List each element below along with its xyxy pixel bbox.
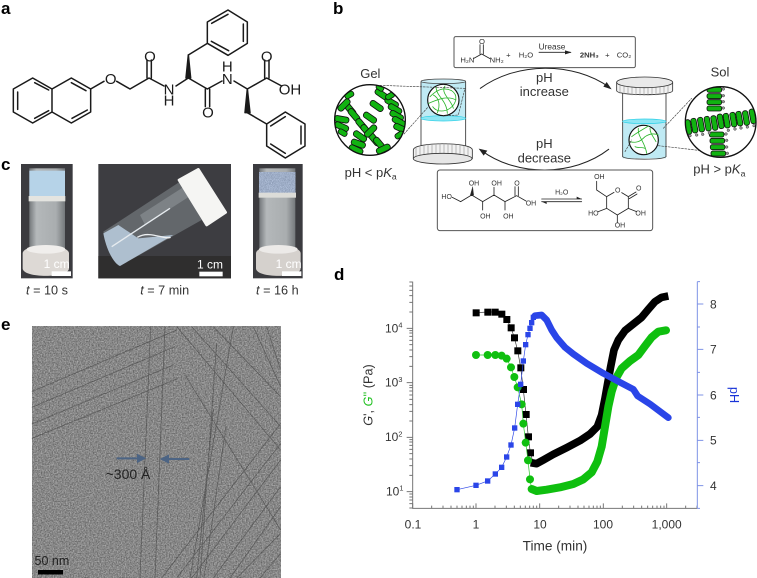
panel a: chemical structure of gelator: O [144, 48, 156, 65]
pH axis tick labels: 5 [710, 434, 717, 448]
dashed zoom lines [380, 85, 710, 152]
gluconic acid and lactone box: O [615, 188, 621, 195]
labels: pH increase and decrease: pH [536, 136, 553, 151]
urease reaction box: CO₂ [617, 50, 631, 59]
series: G' black [473, 296, 668, 464]
x axis tick labels: 1 [473, 518, 480, 532]
pH axis tick labels [710, 297, 717, 493]
gluconic acid and lactone box: OH [635, 211, 646, 218]
y axis tick labels: 10 [385, 430, 398, 444]
scale bar 50 nm [34, 554, 69, 574]
labels: Gel, Sol and pKa conditions: Sol [711, 65, 729, 80]
pH axis tick labels: 4 [710, 479, 717, 493]
x axis tick labels [405, 518, 682, 532]
y axis tick labels: 10 [385, 376, 398, 390]
y axis tick labels: 1 [399, 484, 403, 493]
arrow: pH increase [480, 68, 612, 89]
labels: Gel, Sol and pKa conditions: a [392, 172, 397, 182]
urease reaction box [454, 37, 635, 68]
labels: pH increase and decrease: decrease [518, 150, 571, 165]
panel a: chemical structure of gelator: N [164, 82, 174, 99]
urease reaction box: 2NH₃ [580, 50, 599, 59]
labels: Gel, Sol and pKa conditions [345, 65, 746, 182]
panel a: chemical structure of gelator [13, 10, 305, 158]
gluconic acid and lactone box: O [636, 186, 642, 193]
urease reaction box: H₂N [460, 56, 474, 65]
fibres [32, 327, 281, 578]
gluconic acid and lactone box: O [514, 180, 520, 187]
panel label c: c [1, 155, 10, 174]
urease reaction box: NH₂ [490, 56, 504, 65]
panel a: chemical structure of gelator: H [164, 92, 174, 109]
pH axis tick labels: 6 [710, 388, 717, 402]
photo captions: t = 7 min [140, 283, 189, 297]
x axis tick labels: 1,000 [652, 518, 682, 532]
x axis tick labels: 10 [533, 518, 547, 532]
arrow: pH decrease [479, 149, 609, 170]
photo: t = 16 h: 1 cm [276, 257, 302, 271]
urease reaction box: + [605, 50, 610, 59]
panel e: cryo-EM micrograph [32, 326, 281, 578]
series: pH blue [454, 315, 668, 492]
series: G'' green [472, 330, 666, 491]
photo: t = 7 min: 1 cm [197, 257, 223, 271]
gluconic acid and lactone box: OH [491, 181, 502, 188]
labels: pH increase and decrease: increase [520, 84, 569, 99]
panel a: chemical structure of gelator: H [222, 58, 233, 75]
right pH axis [697, 282, 703, 508]
x axis tick labels: 0.1 [405, 518, 422, 532]
urease reaction box: Urease [539, 41, 566, 51]
panel a: chemical structure of gelator: O [261, 48, 272, 65]
gluconic acid and lactone box: OH [480, 213, 491, 220]
left and bottom axes [407, 282, 697, 508]
gluconic acid and lactone box: OH [615, 222, 625, 229]
gluconic acid and lactone box: OH [526, 201, 536, 208]
panel b: gel-sol schematic [334, 37, 757, 231]
labels: pH increase and decrease [518, 70, 571, 165]
gluconic acid and lactone box: OH [469, 181, 479, 188]
panel d: rheology and pH chart [362, 282, 741, 554]
panel label e: e [1, 315, 10, 334]
gluconic acid and lactone box: OH [503, 213, 514, 220]
pH axis tick labels: 8 [710, 297, 717, 311]
labels: Gel, Sol and pKa conditions: pH > pK [693, 162, 741, 177]
gluconic acid and lactone box: HO [441, 194, 452, 201]
sol magnified circle [684, 87, 757, 157]
x axis title: Time (min) [523, 539, 587, 554]
photo captions: t = 16 h [256, 283, 299, 297]
labels: pH increase and decrease: pH [536, 70, 553, 85]
gluconic acid and lactone box: OH [594, 174, 605, 181]
width arrows [117, 455, 189, 462]
y axis tick labels [385, 321, 403, 498]
y axis tick labels: 2 [398, 429, 402, 438]
panel label d: d [334, 265, 344, 284]
right y axis title: pH [727, 387, 741, 403]
urease reaction box: H₂O [519, 50, 533, 59]
gluconic acid and lactone box [437, 170, 653, 231]
panel a: chemical structure of gelator: O [105, 71, 116, 88]
panel a: chemical structure of gelator: O [202, 105, 214, 122]
photo: t = 16 h [253, 164, 303, 278]
gluconic acid and lactone box: HO [588, 211, 599, 218]
photo: t = 10 s [21, 164, 73, 278]
photo captions: t = 10 s [26, 283, 68, 297]
sol vial [617, 77, 673, 159]
gel vial [413, 79, 472, 164]
panel c: vial photographs [21, 164, 303, 297]
x axis tick labels: 100 [593, 518, 613, 532]
photo captions [26, 283, 299, 297]
photo: t = 7 min [98, 164, 231, 278]
y axis tick labels: 3 [398, 375, 402, 384]
width label: ~300 Å [106, 466, 151, 482]
labels: Gel, Sol and pKa conditions: Gel [360, 66, 381, 81]
left y axis title: G', G'' (Pa) [362, 364, 376, 426]
scale bar 50 nm: 50 nm [34, 554, 69, 568]
labels: Gel, Sol and pKa conditions: a [741, 168, 746, 178]
gluconic acid and lactone box: H₂O [555, 189, 569, 196]
y axis tick labels: 10 [386, 484, 399, 498]
panel a: chemical structure of gelator: OH [279, 82, 301, 99]
panel a: chemical structure of gelator: N [222, 71, 233, 88]
pH axis tick labels: 7 [710, 343, 717, 357]
gel magnified circle [334, 83, 409, 155]
labels: Gel, Sol and pKa conditions: pH < pK [345, 165, 392, 180]
y axis tick labels: 10 [385, 321, 398, 335]
photo: t = 10 s: 1 cm [44, 257, 70, 271]
urease reaction box: O [479, 37, 485, 46]
micrograph noise background [32, 326, 281, 578]
y axis tick labels: 4 [398, 321, 402, 330]
urease reaction box: + [506, 50, 511, 59]
